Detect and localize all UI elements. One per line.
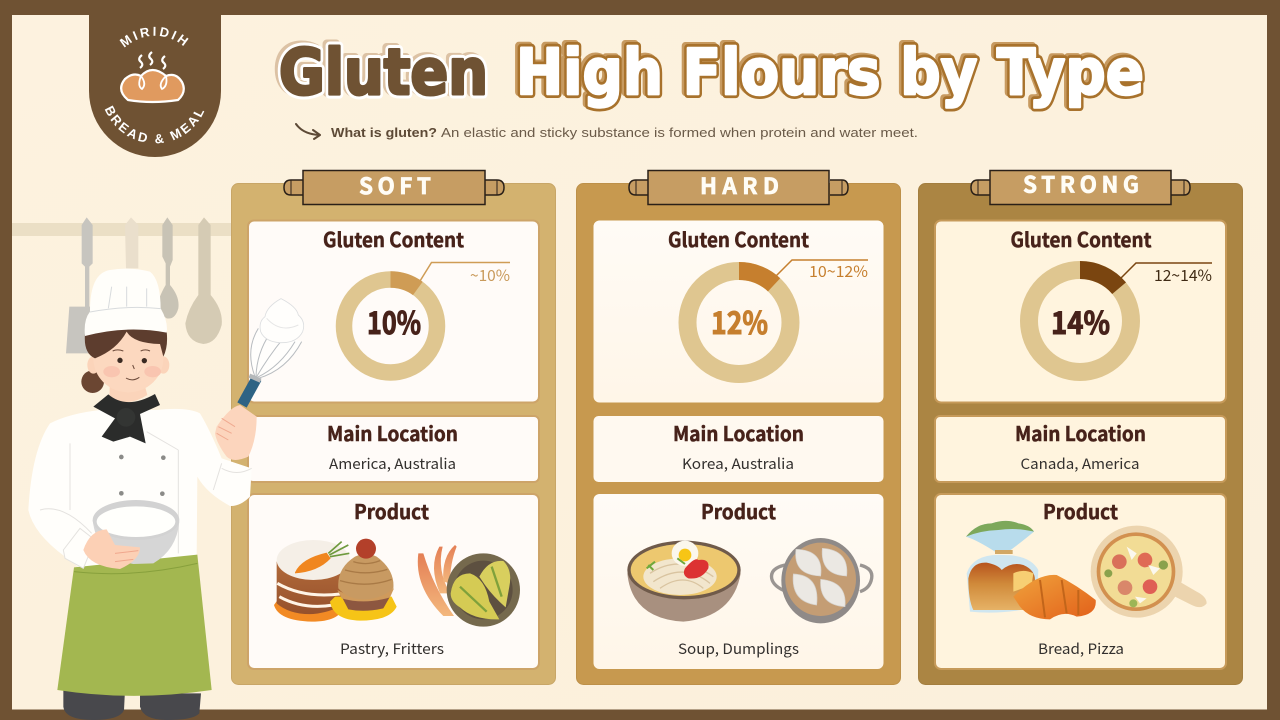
illustration: chef with whisk and bowl [28,269,304,720]
card: product strong: Bread, Pizza [1038,638,1124,659]
icon: noodle soup bowl [627,541,741,622]
title: Gluten [276,34,485,107]
tab: hard [629,169,848,204]
tab: soft: SOFT [359,169,431,201]
tab: strong [971,168,1190,204]
icon: bread loaf and croissant [966,521,1096,619]
panel: strong [918,168,1242,684]
card: main location strong: Main Location [1015,418,1146,447]
tab: soft [284,169,504,204]
donut chart: 12%: 12% [711,298,768,343]
panel: soft [232,169,556,684]
icon: carrot cake and mont blanc [274,539,397,622]
card: main location soft [248,416,539,482]
donut chart: 14%: 12~14% [1154,264,1212,286]
title: High Flours by Type [516,36,1144,109]
panel: hard [576,169,900,684]
title: Gluten [279,36,488,109]
subtitle with arrow: What is gluten? [331,125,437,140]
card: product hard: Product [701,496,777,525]
subtitle with arrow [296,124,918,140]
tab: strong: STRONG [1023,168,1139,200]
card: main location hard [594,416,884,482]
logo badge [89,15,221,157]
donut chart: 12%: 10~12% [809,260,868,282]
donut chart: 12% [688,260,868,374]
card: product soft: Product [354,496,430,525]
kitchen rail and utensils [12,217,231,353]
card: main location hard: Korea, Australia [682,453,794,474]
title: High Flours by Type [516,36,1144,109]
title: Gluten [279,36,488,109]
logo badge: BREAD & MEAL [104,106,204,144]
card: product strong [935,494,1226,669]
icon: shrimp and vegetable fritters [418,545,520,627]
card: gluten content hard: Gluten Content [668,224,810,253]
icon: pizza on a paddle [1091,526,1207,618]
card: main location soft: Main Location [327,418,458,447]
card: main location hard: Main Location [673,418,804,447]
card: main location soft: America, Australia [329,453,456,474]
card: gluten content strong: Gluten Content [1010,224,1152,253]
card: product soft [248,494,539,669]
donut chart: 14% [1029,263,1212,372]
card: product strong: Product [1043,496,1119,525]
card: product hard: Soup, Dumplings [678,638,799,659]
donut chart: 10%: 10% [367,298,421,343]
icon: steamed dumplings [771,538,872,623]
card: product hard [594,494,884,669]
donut chart: 14%: 14% [1051,298,1110,343]
card: product soft: Pastry, Fritters [340,638,444,659]
card: main location strong [935,416,1226,482]
title: High Flours by Type [514,34,1142,107]
card: gluten content strong [935,220,1226,402]
donut chart: 10% [344,262,510,372]
logo badge: MIRIDIH [120,26,188,48]
donut chart: 10%: ~10% [470,264,510,286]
tab: hard: HARD [700,169,779,201]
card: main location strong: Canada, America [1020,453,1140,474]
title [276,34,1144,109]
subtitle with arrow: An elastic and sticky substance is formed when protein and water meet. [441,125,918,140]
card: gluten content soft: Gluten Content [323,224,465,253]
card: gluten content soft [248,220,539,402]
card: gluten content hard [594,220,884,402]
